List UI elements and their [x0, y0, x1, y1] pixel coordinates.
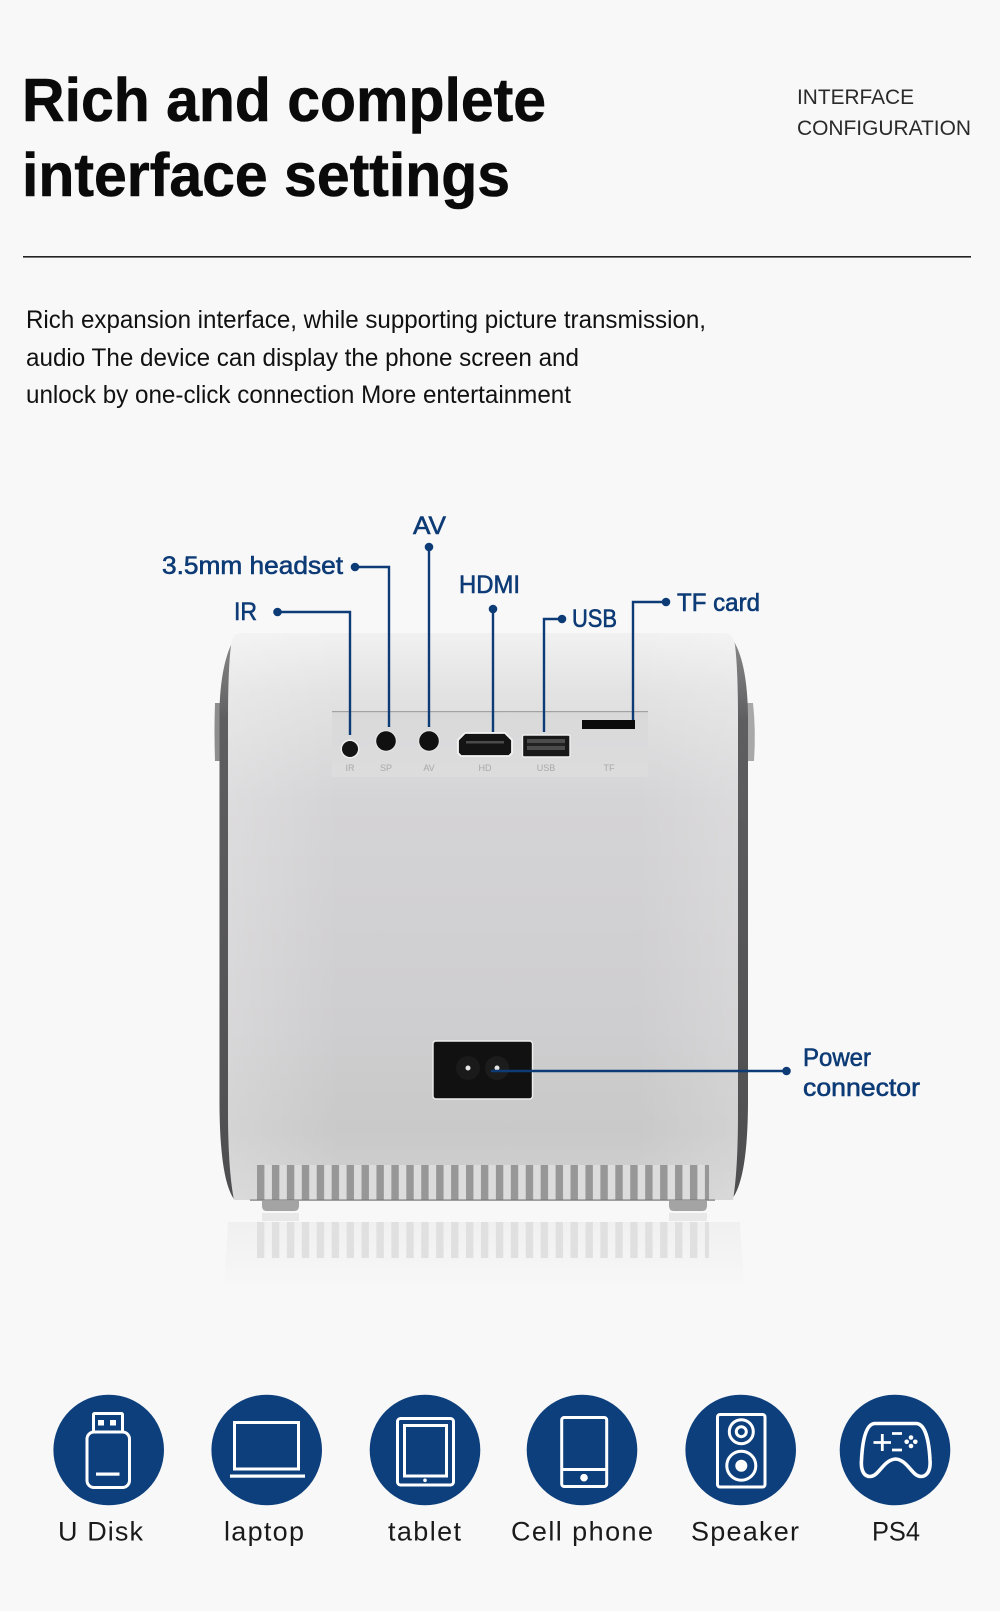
title: Rich and complete [22, 66, 546, 134]
callout: AV: AV [413, 512, 446, 540]
callout: IR [234, 598, 350, 735]
callout: power connector: connector [803, 1074, 920, 1102]
port: USB: USB [537, 763, 555, 773]
icon: phone [527, 1395, 637, 1505]
projector body [228, 633, 738, 1200]
port: AV [418, 730, 440, 773]
dark side shells [219, 636, 748, 1199]
device: U Disk: U Disk [58, 1516, 144, 1546]
device: laptop: laptop [224, 1516, 304, 1546]
device: PS4 [840, 1395, 950, 1546]
section tag: interface configuration: INTERFACE [797, 86, 914, 109]
device: tablet: tablet [388, 1516, 461, 1546]
icon: laptop [211, 1395, 322, 1505]
icon: USB drive [53, 1395, 164, 1505]
device: speaker [685, 1395, 799, 1546]
description paragraph [26, 306, 706, 409]
callout: TF card [633, 589, 760, 720]
section tag: interface configuration: CONFIGURATION [797, 117, 971, 140]
callout: power connector: Power [803, 1044, 871, 1072]
icon: game controller [840, 1395, 950, 1505]
port: TF: TF [604, 763, 615, 773]
port: AV: AV [423, 763, 435, 773]
port: IR: IR [346, 763, 355, 773]
port: HDMI: HD [478, 763, 492, 773]
device: U Disk [53, 1395, 164, 1546]
device: tablet [370, 1395, 480, 1546]
vent grille [257, 1165, 709, 1200]
description paragraph: Rich expansion interface, while supporting picture transmission, [26, 306, 706, 334]
callout: USB: USB [572, 605, 617, 633]
rubber foot left [262, 1201, 299, 1211]
callout: HDMI [459, 571, 520, 732]
port: SP: SP [380, 763, 392, 773]
power socket [433, 1041, 532, 1099]
description paragraph: audio The device can display the phone screen and [26, 344, 579, 372]
device: speaker: Speaker [691, 1516, 799, 1546]
callout: IR: IR [234, 598, 257, 626]
icon: tablet [370, 1395, 480, 1505]
title: interface settings [22, 141, 510, 209]
callout: TF card: TF card [677, 589, 760, 617]
device: cell phone: Cell phone [511, 1516, 653, 1546]
callout: HDMI: HDMI [459, 571, 520, 599]
port: USB [522, 735, 570, 773]
port: SP [375, 730, 397, 773]
device: PS4: PS4 [872, 1516, 920, 1546]
port panel [332, 711, 648, 777]
description paragraph: unlock by one-click connection More entertainment [26, 381, 571, 409]
side knob right [745, 703, 755, 761]
projector reflection [224, 1213, 744, 1292]
title [22, 66, 546, 209]
callout: USB [544, 605, 617, 732]
rubber foot right [669, 1201, 707, 1211]
callout: AV [413, 512, 446, 727]
icon: speaker [685, 1395, 796, 1505]
section tag: interface configuration [797, 86, 971, 140]
side knob left [214, 703, 222, 761]
callout: 3.5mm headset [162, 552, 389, 727]
projector rear view [214, 633, 755, 1211]
callout: power connector [491, 1044, 920, 1102]
device: cell phone [511, 1395, 653, 1546]
port: HDMI [458, 733, 512, 773]
device: laptop [211, 1395, 322, 1546]
port: IR [340, 740, 360, 773]
port: TF [582, 720, 635, 773]
callout: 3.5mm headset: 3.5mm headset [162, 552, 343, 580]
